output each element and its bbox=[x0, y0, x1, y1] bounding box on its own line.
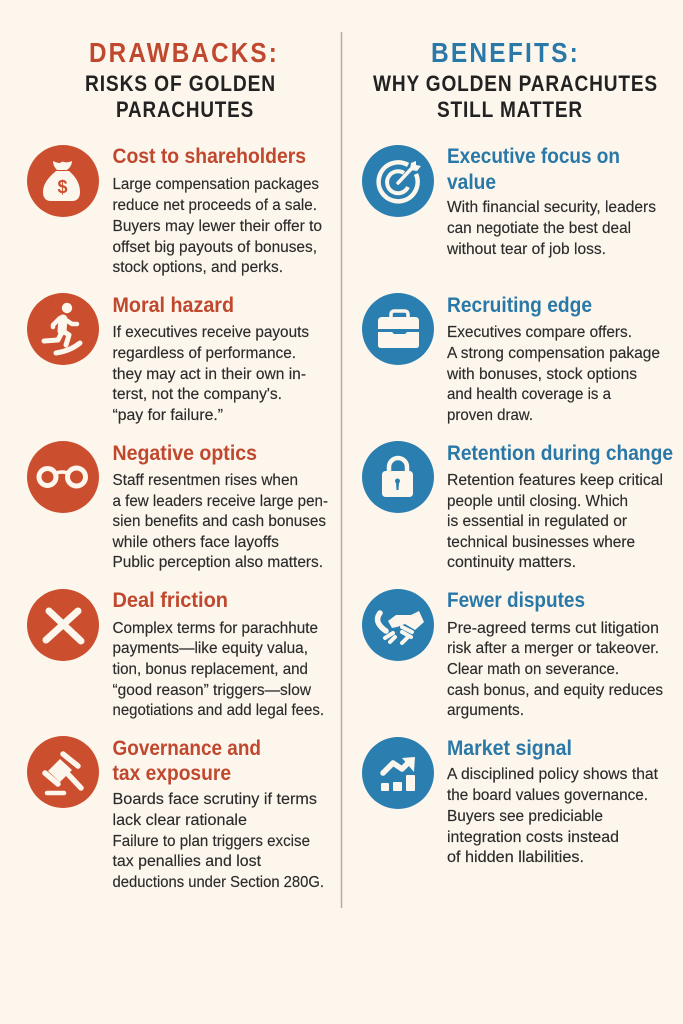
text: cost to shareholders: offset big payouts of bonuses, bbox=[112, 239, 317, 256]
text: retention during change: is essential in regulated or bbox=[447, 513, 627, 530]
heading: market signal: Market signal bbox=[447, 737, 572, 760]
text: deal friction: negotiations and add legal fees. bbox=[112, 702, 324, 719]
text: moral hazard: If executives receive payouts bbox=[112, 324, 309, 341]
text: negative optics: while others face layoffs bbox=[112, 534, 279, 551]
text: recruiting edge: Executives compare offers. bbox=[447, 324, 632, 341]
heading: drawbacks bbox=[85, 37, 279, 122]
text: executive focus on value: With financial security, leaders bbox=[447, 199, 656, 216]
icon: briefcase bbox=[362, 293, 434, 365]
heading: governance and tax exposure: tax exposure bbox=[112, 762, 231, 785]
text: deal friction bbox=[112, 620, 324, 719]
text: cost to shareholders: reduce net proceeds of a sale. bbox=[112, 197, 317, 214]
text: fewer disputes: risk after a merger or takeover. bbox=[447, 640, 659, 657]
text: deal friction: tion, bonus replacement, and bbox=[112, 661, 308, 678]
text: executive focus on value bbox=[446, 199, 656, 258]
text: market signal bbox=[447, 766, 659, 866]
panel: benefits bbox=[362, 37, 673, 866]
item: market signal bbox=[362, 737, 659, 866]
text: retention during change: technical businesses where bbox=[447, 534, 635, 551]
heading: moral hazard: Moral hazard bbox=[112, 294, 234, 317]
text: governance and tax exposure: Boards face scrutiny if terms bbox=[112, 791, 317, 808]
text: governance and tax exposure: lack clear rationale bbox=[112, 812, 247, 829]
heading: executive focus on value bbox=[447, 145, 620, 194]
heading: benefits bbox=[373, 37, 658, 122]
text: moral hazard: they may act in their own in- bbox=[112, 366, 306, 383]
item: deal friction bbox=[27, 589, 324, 719]
text: retention during change bbox=[447, 472, 663, 571]
heading: drawbacks: DRAWBACKS: bbox=[89, 37, 279, 68]
heading: negative optics: Negative optics bbox=[112, 442, 257, 465]
text: governance and tax exposure: Failure to plan triggers excise bbox=[112, 833, 310, 850]
heading: executive focus on value: value bbox=[447, 171, 496, 194]
heading: drawbacks: PARACHUTES bbox=[116, 97, 254, 122]
text: deal friction: payments—like equity valua, bbox=[112, 640, 308, 657]
heading: governance and tax exposure: Governance and bbox=[112, 737, 261, 760]
text: recruiting edge: and health coverage is a bbox=[447, 386, 611, 403]
text: fewer disputes: Pre-agreed terms cut litigation bbox=[447, 620, 659, 637]
text: retention during change: Retention features keep critical bbox=[447, 472, 663, 489]
heading: fewer disputes: Fewer disputes bbox=[447, 589, 585, 612]
icon: running figure on board bbox=[27, 293, 99, 365]
text: executive focus on value: can negotiate the best deal bbox=[447, 220, 631, 237]
text: negative optics: Staff resentmen rises when bbox=[112, 472, 298, 489]
text: moral hazard: “pay for failure.” bbox=[112, 407, 223, 424]
item: moral hazard bbox=[27, 293, 309, 424]
text: fewer disputes: arguments. bbox=[447, 702, 524, 719]
text: governance and tax exposure: tax penallies and lost bbox=[112, 853, 262, 870]
heading: deal friction: Deal friction bbox=[112, 589, 228, 612]
text: retention during change: continuity matters. bbox=[447, 554, 576, 571]
text: fewer disputes: Clear math on severance. bbox=[447, 661, 619, 678]
text: cost to shareholders: stock options, and perks. bbox=[112, 259, 283, 276]
text: negative optics bbox=[112, 472, 328, 571]
heading: benefits: BENEFITS: bbox=[431, 37, 580, 68]
text: market signal: of hidden llabilities. bbox=[447, 849, 584, 866]
text: moral hazard: terst, not the company's. bbox=[112, 386, 282, 403]
text: cost to shareholders: Buyers may lewer their offer to bbox=[112, 218, 322, 235]
text: fewer disputes: cash bonus, and equity reduces bbox=[447, 682, 663, 699]
text: negative optics: a few leaders receive large pen- bbox=[112, 493, 328, 510]
text: fewer disputes bbox=[447, 620, 663, 719]
icon: padlock bbox=[362, 441, 434, 513]
item: recruiting edge bbox=[362, 293, 660, 424]
text: retention during change: people until closing. Which bbox=[447, 493, 628, 510]
item: retention during change bbox=[362, 441, 673, 571]
heading: governance and tax exposure bbox=[112, 737, 261, 785]
icon: rising chart bbox=[362, 737, 434, 809]
icon: gavel bbox=[27, 736, 99, 808]
panel: drawbacks bbox=[27, 37, 328, 891]
text: governance and tax exposure bbox=[112, 791, 324, 891]
text: recruiting edge: proven draw. bbox=[447, 407, 533, 424]
text: market signal: Buyers see prediciable bbox=[447, 808, 603, 825]
icon: handshake bbox=[362, 589, 434, 661]
heading: drawbacks: RISKS OF GOLDEN bbox=[85, 71, 276, 96]
text: market signal: the board values governance. bbox=[447, 787, 648, 804]
icon: money bag: $ bbox=[57, 177, 68, 197]
text: negative optics: sien benefits and cash bonuses bbox=[112, 513, 326, 530]
item: executive focus on value bbox=[362, 145, 656, 258]
item: governance and tax exposure bbox=[27, 736, 324, 891]
text: deal friction: Complex terms for parachhute bbox=[112, 620, 318, 637]
text: moral hazard: regardless of performance. bbox=[112, 345, 296, 362]
text: governance and tax exposure: deductions under Section 280G. bbox=[112, 874, 324, 891]
text: deal friction: “good reason” triggers—slow bbox=[112, 682, 312, 699]
text: market signal: integration costs instead bbox=[447, 829, 619, 846]
heading: benefits: STILL MATTER bbox=[437, 97, 583, 122]
text: cost to shareholders bbox=[112, 176, 322, 276]
icon: money bag bbox=[27, 145, 99, 217]
text: cost to shareholders: Large compensation packages bbox=[112, 176, 319, 193]
heading: cost to shareholders: Cost to shareholders bbox=[112, 145, 306, 168]
icon: target with arrow bbox=[362, 145, 434, 217]
text: recruiting edge: with bonuses, stock options bbox=[446, 366, 637, 383]
icon: glasses bbox=[27, 441, 99, 513]
heading: executive focus on value: Executive focus on bbox=[447, 145, 620, 168]
text: negative optics: Public perception also matters. bbox=[112, 554, 323, 571]
text: market signal: A disciplined policy shows that bbox=[447, 766, 659, 783]
text: recruiting edge bbox=[446, 324, 660, 424]
item: negative optics bbox=[27, 441, 328, 571]
text: recruiting edge: A strong compensation pakage bbox=[447, 345, 660, 362]
icon: crossed x bbox=[27, 589, 99, 661]
item: fewer disputes bbox=[362, 589, 663, 719]
text: moral hazard bbox=[112, 324, 309, 424]
text: executive focus on value: without tear of job loss. bbox=[446, 241, 606, 258]
heading: recruiting edge: Recruiting edge bbox=[447, 294, 592, 317]
item: cost to shareholders bbox=[27, 145, 322, 276]
